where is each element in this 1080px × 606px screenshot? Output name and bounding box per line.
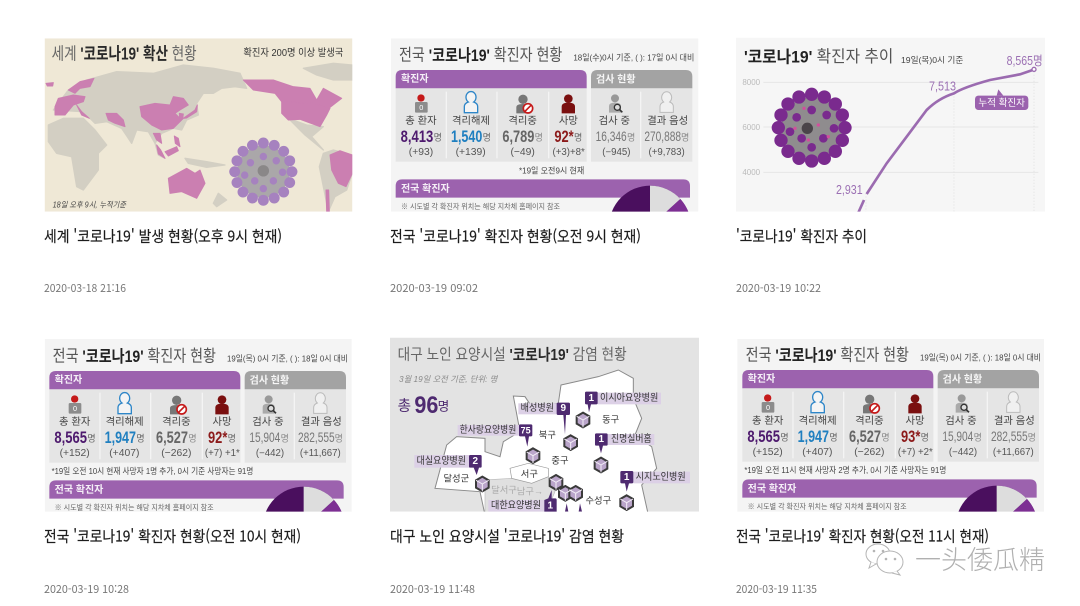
numbers row: 명 bbox=[780, 433, 789, 443]
changes row: (+11,667) bbox=[300, 448, 341, 459]
pie chart bbox=[263, 487, 345, 569]
labels row: 격리해제 bbox=[452, 114, 490, 127]
changes row: (+7) +1* bbox=[205, 448, 240, 459]
icon: isolated bbox=[170, 396, 186, 414]
section header: 전국 확진자 bbox=[748, 482, 796, 495]
numbers row: 282,555 bbox=[298, 430, 335, 445]
changes row: (+9,783) bbox=[649, 147, 685, 158]
label: 시지노인병원 bbox=[620, 471, 690, 492]
axis labels: 8000 bbox=[742, 78, 761, 87]
header: confirmed: 확진자 bbox=[401, 72, 429, 85]
header: tests: 검사 현황 bbox=[596, 72, 636, 85]
numbers row: 93* bbox=[901, 427, 921, 446]
numbers row: 6,527 bbox=[849, 427, 881, 446]
numbers row: 15,904 bbox=[249, 430, 281, 445]
date note: 18일(수)0시 기준, ( ): 17일 0시 대비 bbox=[573, 52, 694, 62]
changes row: (+152) bbox=[753, 447, 783, 458]
map: gray land masses bbox=[48, 63, 352, 212]
labels row: 검사 중 bbox=[945, 415, 977, 427]
panel: world map infographic bbox=[45, 38, 352, 212]
panel: national status 19 March 11am bbox=[735, 337, 1048, 568]
label: 배성병원: 9 bbox=[561, 403, 567, 414]
label: 배성병원 bbox=[518, 402, 570, 434]
heading: 전국 '코로나19' 확진자 현황 bbox=[53, 346, 216, 365]
numbers row: 8,565 bbox=[54, 428, 87, 447]
icon: total patients bbox=[69, 395, 81, 414]
icon: total patients: 0 bbox=[419, 103, 423, 112]
changes row: (+7) +2* bbox=[898, 447, 933, 458]
panel: national status 18 March bbox=[391, 38, 698, 212]
changes row: (−49) bbox=[510, 147, 535, 158]
caption 6: 전국 '코로나19' 확진자 현황(오전 11시 현재) bbox=[736, 526, 989, 546]
footnote: *19일 오전 10시 현재 사망자 1명 추가, 0시 기준 사망자는 91명 bbox=[52, 466, 253, 476]
labels row bbox=[752, 414, 1035, 427]
data labels: 7,513 bbox=[929, 80, 956, 94]
icon: isolated bbox=[863, 395, 879, 413]
labels row: 총 환자 bbox=[752, 415, 784, 427]
changes row bbox=[753, 447, 1034, 458]
labels row: 격리해제 bbox=[799, 414, 837, 427]
caption 5: 대구 노인 요양시설 '코로나19' 감염 현황 bbox=[390, 526, 624, 546]
numbers row: 명 bbox=[921, 433, 929, 443]
panel: Daegu nursing home map bbox=[390, 338, 699, 515]
numbers row: 명 bbox=[434, 133, 442, 143]
numbers row: 1,540 bbox=[451, 127, 482, 146]
changes row bbox=[60, 448, 341, 459]
changes row: (−262) bbox=[161, 448, 191, 459]
label: 이시아요양병원: 1 bbox=[589, 393, 595, 404]
date 1: 2020-03-18 21:16 bbox=[44, 280, 126, 296]
labels row: 격리중 bbox=[508, 114, 537, 127]
data labels: 8,565명 bbox=[1007, 54, 1043, 68]
labels row: 결과 음성 bbox=[301, 416, 342, 428]
labels row: 검사 중 bbox=[252, 416, 284, 428]
numbers row: 명 bbox=[136, 434, 145, 444]
date note: 19일(목) 0시 기준, ( ): 18일 0시 대비 bbox=[227, 353, 348, 363]
icon: coronavirus bbox=[229, 138, 297, 206]
label: 대실요양병원 bbox=[414, 455, 482, 475]
numbers row: 명 bbox=[574, 133, 582, 143]
icon: chat bubbles bbox=[866, 544, 903, 575]
label: 한사랑요양병원 bbox=[458, 424, 532, 447]
heading: 전국 '코로나19' 확진자 현황 bbox=[399, 45, 562, 64]
heading: '코로나19' 확진자 추이 bbox=[744, 47, 893, 66]
numbers row: 92* bbox=[554, 127, 574, 146]
stat panels bbox=[49, 389, 346, 463]
data labels bbox=[836, 54, 1043, 197]
icon: total patients: 0 bbox=[73, 404, 77, 413]
pie chart bbox=[609, 186, 691, 268]
labels row bbox=[406, 115, 687, 125]
map subtitle: 확진자 200명 이상 발생국 bbox=[243, 47, 343, 59]
axis labels: 4000 bbox=[742, 168, 761, 177]
icon: testing bbox=[263, 395, 276, 414]
district names: 중구 bbox=[551, 456, 569, 466]
header: tests bbox=[938, 370, 1039, 388]
labels row: 사망 bbox=[212, 416, 232, 428]
total: 명 bbox=[438, 400, 449, 414]
label: 대실요양병원: 대실요양병원 bbox=[417, 455, 466, 467]
watermark bbox=[866, 544, 1045, 575]
date note: 3월 19일 오전 기준, 단위: 명 bbox=[399, 374, 499, 384]
numbers row: 6,527 bbox=[156, 428, 188, 447]
numbers row: 명 bbox=[335, 434, 343, 444]
numbers row: 명 bbox=[974, 433, 982, 443]
changes row: (+407) bbox=[802, 447, 832, 458]
numbers row: 명 bbox=[627, 133, 635, 143]
section header: 전국 확진자 bbox=[55, 483, 103, 496]
icon: total patients bbox=[415, 94, 428, 113]
total: 총 bbox=[398, 398, 411, 415]
icon: negative bbox=[314, 393, 327, 413]
heading: 세계 '코로나19' 확산 현황 bbox=[52, 43, 197, 63]
date note: 19일(목) 0시 기준, ( ): 18일 0시 대비 bbox=[920, 352, 1041, 362]
numbers row bbox=[747, 427, 1036, 446]
icon: released bbox=[464, 92, 478, 113]
caption 2: 전국 '코로나19' 확진자 현황(오전 9시 현재) bbox=[390, 226, 641, 246]
numbers row: 282,555 bbox=[991, 429, 1028, 444]
district names: 북구 bbox=[539, 430, 556, 440]
date 4: 2020-03-19 10:28 bbox=[44, 581, 129, 597]
header: confirmed bbox=[49, 371, 240, 389]
map: pink affected countries bbox=[46, 78, 352, 212]
heading: 전국 '코로나19' 확진자 현황 bbox=[746, 345, 909, 364]
numbers row: 명 bbox=[1028, 433, 1036, 443]
date note: 19일(목)0시 기준 bbox=[901, 55, 964, 65]
changes row: (−442) bbox=[256, 448, 284, 459]
pie chart bbox=[956, 486, 1038, 568]
icon: released bbox=[118, 393, 131, 414]
date 3: 2020-03-19 10:22 bbox=[736, 280, 821, 296]
stat panels bbox=[396, 88, 692, 162]
label: 배성병원: 배성병원 bbox=[521, 402, 554, 414]
note: ※ 시도별 각 확진자 위치는 해당 지차체 홈페이지 참조 bbox=[401, 202, 560, 211]
icon: testing bbox=[609, 94, 622, 113]
numbers row: 6,789 bbox=[502, 127, 534, 146]
note: ※ 시도별 각 확진자 위치는 해당 지차체 홈페이지 참조 bbox=[748, 502, 907, 511]
icon: negative bbox=[660, 92, 673, 112]
numbers row: 명 bbox=[483, 133, 491, 143]
numbers row: 명 bbox=[281, 434, 289, 444]
header: confirmed: 확진자 bbox=[748, 372, 775, 385]
axis labels bbox=[742, 78, 761, 177]
district names: 남구→ bbox=[517, 487, 543, 497]
note: ※ 시도별 각 확진자 위치는 해당 지차체 홈페이지 참조 bbox=[55, 503, 214, 512]
section header bbox=[742, 479, 1037, 498]
header: tests: 검사 현황 bbox=[250, 373, 289, 386]
data labels: 2,931 bbox=[836, 183, 863, 197]
numbers row: 1,947 bbox=[105, 428, 136, 447]
footnote: *19일 오전9시 현재 bbox=[519, 165, 584, 175]
header: confirmed bbox=[396, 70, 587, 88]
numbers row: 명 bbox=[228, 434, 236, 444]
icon: total patients bbox=[762, 394, 774, 413]
label: 시지노인병원: 1 bbox=[624, 472, 630, 483]
total bbox=[398, 392, 449, 419]
district names: 달서구 bbox=[491, 484, 517, 495]
header: tests bbox=[591, 70, 692, 88]
numbers row: 명 bbox=[188, 434, 197, 444]
label: 대실요양병원: 2 bbox=[473, 456, 479, 467]
date 6: 2020-03-19 11:35 bbox=[736, 581, 817, 597]
labels row: 격리해제 bbox=[106, 415, 144, 428]
numbers row: 8,413 bbox=[401, 127, 433, 146]
marker tails bbox=[565, 503, 582, 512]
changes row: (+407) bbox=[109, 448, 139, 459]
changes row: (−945) bbox=[602, 147, 630, 158]
caption 3: '코로나19' 확진자 추이 bbox=[736, 226, 867, 246]
caption 1: 세계 '코로나19' 발생 현황(오후 9시 현재) bbox=[44, 226, 282, 246]
panel: national status 19 March 10am bbox=[45, 339, 352, 512]
labels row: 격리중 bbox=[855, 414, 884, 427]
icon: deaths bbox=[908, 394, 922, 413]
header: confirmed: 확진자 bbox=[55, 373, 82, 386]
district names: 서구 bbox=[521, 469, 538, 479]
labels row: 사망 bbox=[559, 115, 578, 127]
label: 대한요양병원: 1 bbox=[548, 500, 554, 511]
numbers row bbox=[401, 130, 688, 144]
header: confirmed bbox=[742, 370, 933, 388]
changes row: (−262) bbox=[854, 447, 884, 458]
caption 4: 전국 '코로나19' 확진자 현황(오전 10시 현재) bbox=[44, 526, 301, 546]
labels row: 격리중 bbox=[162, 415, 191, 428]
icon: coronavirus bbox=[772, 88, 852, 168]
changes row: (+11,667) bbox=[993, 447, 1034, 458]
labels row: 결과 음성 bbox=[647, 115, 688, 127]
hexagon markers bbox=[476, 413, 633, 510]
map footnote: 18일 오후 9시, 누적기준 bbox=[53, 200, 127, 209]
date 2: 2020-03-19 09:02 bbox=[390, 280, 478, 296]
label: 진명실버홈 bbox=[595, 432, 654, 453]
icon: released bbox=[811, 392, 824, 413]
labels row: 사망 bbox=[905, 415, 925, 427]
changes row: (+93) bbox=[409, 147, 433, 158]
axis labels: 6000 bbox=[742, 123, 761, 132]
callout bbox=[975, 89, 1028, 110]
callout: 누적 확진자 bbox=[978, 97, 1025, 109]
numbers row: 92* bbox=[208, 428, 228, 447]
numbers row: 16,346 bbox=[596, 129, 627, 144]
labels row: 총 환자 bbox=[59, 416, 91, 428]
stat panels bbox=[742, 388, 1039, 462]
section header: 전국 확진자 bbox=[401, 182, 450, 195]
label: 이시아요양병원 bbox=[585, 392, 661, 412]
numbers row: 명 bbox=[535, 133, 543, 143]
label: 진명실버홈: 1 bbox=[599, 434, 605, 445]
icon: isolated bbox=[516, 95, 533, 113]
section header bbox=[49, 480, 344, 499]
label: 대한요양병원: 대한요양병원 bbox=[491, 499, 541, 511]
total: 96 bbox=[414, 392, 438, 419]
numbers row: 270,888 bbox=[644, 129, 681, 144]
heading: 대구 노인 요양시설 '코로나19' 감염 현황 bbox=[398, 346, 627, 363]
district names bbox=[443, 414, 620, 506]
district names: 수성구 bbox=[585, 496, 612, 506]
labels row bbox=[59, 415, 342, 428]
changes row: (+3)+8* bbox=[553, 147, 585, 158]
icon: negative bbox=[1007, 392, 1020, 412]
header: tests bbox=[245, 371, 346, 389]
label: 한사랑요양병원: 한사랑요양병원 bbox=[460, 424, 516, 436]
changes row: (+139) bbox=[456, 147, 486, 158]
changes row bbox=[409, 148, 684, 157]
icon: testing bbox=[956, 394, 969, 413]
numbers row: 15,904 bbox=[942, 429, 974, 444]
numbers row bbox=[54, 428, 343, 447]
labels row: 총 환자 bbox=[405, 115, 437, 127]
label: 이시아요양병원: 이시아요양병원 bbox=[600, 392, 658, 404]
numbers row: 명 bbox=[87, 434, 96, 444]
icon: deaths bbox=[215, 395, 229, 414]
numbers row: 명 bbox=[829, 433, 838, 443]
footnote: *19일 오전 11시 현재 사망자 2명 추가, 0시 기준 사망자는 91명 bbox=[744, 465, 946, 475]
numbers row: 명 bbox=[681, 133, 689, 143]
changes row: (−442) bbox=[949, 447, 977, 458]
numbers row: 8,565 bbox=[747, 427, 780, 446]
line chart bbox=[858, 67, 1036, 213]
district map bbox=[435, 370, 657, 515]
date 5: 2020-03-19 11:48 bbox=[390, 581, 475, 597]
changes row: (+152) bbox=[60, 448, 90, 459]
header: tests: 검사 현황 bbox=[943, 372, 982, 385]
labels row: 검사 중 bbox=[599, 115, 630, 127]
district names: 달성군 bbox=[443, 472, 470, 483]
watermark text: 一头倭瓜精 bbox=[915, 545, 1045, 575]
label: 한사랑요양병원: 75 bbox=[521, 425, 531, 435]
numbers row: 명 bbox=[881, 433, 890, 443]
icon: total patients: 0 bbox=[766, 403, 770, 412]
label: 진명실버홈: 진명실버홈 bbox=[611, 432, 652, 445]
section header bbox=[396, 179, 690, 198]
label: 시지노인병원: 시지노인병원 bbox=[636, 471, 686, 483]
numbers row: 1,947 bbox=[798, 427, 829, 446]
panel: cumulative trend chart bbox=[736, 38, 1045, 213]
district names: 동구 bbox=[602, 414, 620, 424]
labels row: 결과 음성 bbox=[994, 415, 1035, 427]
icon: deaths bbox=[562, 94, 575, 113]
label: 대한요양병원 bbox=[488, 490, 557, 515]
